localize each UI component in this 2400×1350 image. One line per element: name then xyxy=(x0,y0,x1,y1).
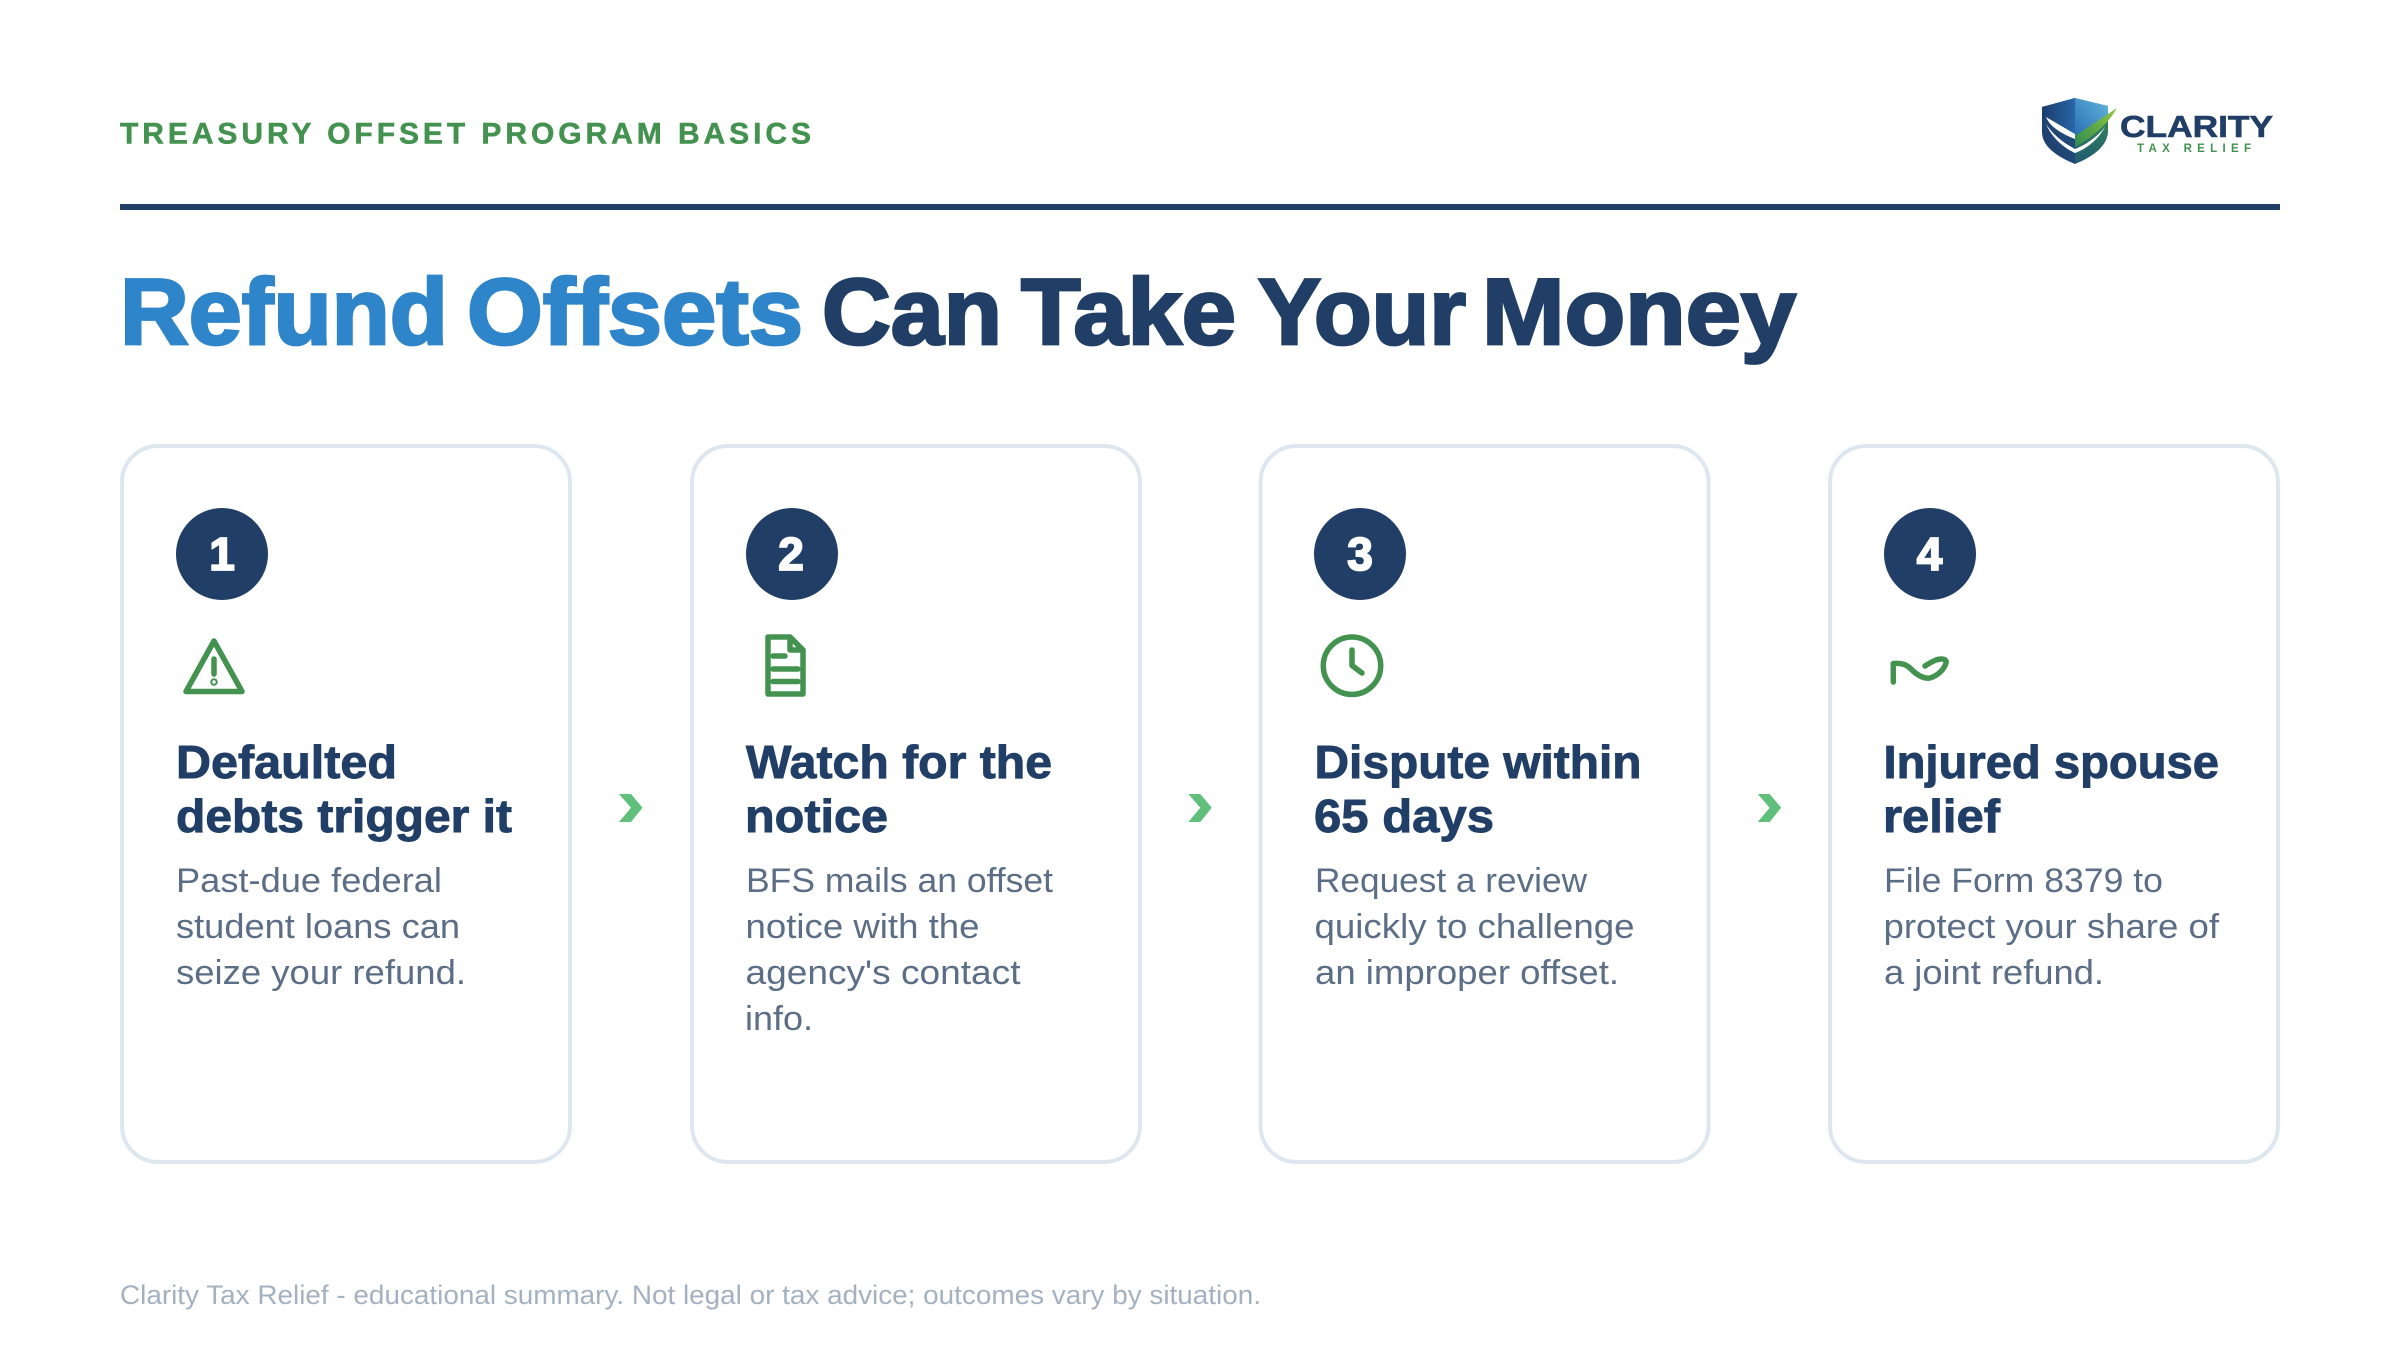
step 1 body: seize your refund. xyxy=(176,954,466,992)
step 4 heading: Injured spouse xyxy=(1884,736,2219,788)
step number 4 xyxy=(1884,508,1976,600)
step 4 body: a joint refund. xyxy=(1884,954,2104,992)
step number 3: 3 xyxy=(1347,528,1373,580)
step 4 heading: relief xyxy=(1883,790,2001,842)
step 3 body: Request a review xyxy=(1315,862,1587,900)
icon: document xyxy=(768,637,803,694)
step 1 heading: Defaulted xyxy=(176,736,397,788)
step 2 body xyxy=(745,862,1054,1038)
step 4 heading xyxy=(1883,736,2219,842)
step 3 heading: 65 days xyxy=(1314,790,1494,842)
step 2 body: notice with the xyxy=(746,908,980,946)
step 4 body: File Form 8379 to xyxy=(1884,862,2163,900)
arrow 3 xyxy=(1758,794,1781,822)
step 1 body xyxy=(176,862,466,992)
step 2 heading: notice xyxy=(745,790,888,842)
arrow 2 xyxy=(1188,794,1212,822)
icon: clock xyxy=(1323,637,1381,694)
logo: Clarity Tax Relief: TAX RELIEF xyxy=(2137,143,2251,155)
arrow 1 xyxy=(619,794,642,822)
icon: warning triangle xyxy=(186,641,242,692)
step 1 body: Past-due federal xyxy=(176,862,442,900)
step number 3 xyxy=(1314,508,1406,600)
footer disclaimer: Clarity Tax Relief - educational summary. Not legal or tax advice; outcomes vary by situation. xyxy=(120,1280,1261,1310)
logo: Clarity Tax Relief: CLARITY xyxy=(2120,109,2273,144)
eyebrow heading: TREASURY OFFSET PROGRAM BASICS xyxy=(120,118,811,150)
header rule xyxy=(120,204,2280,210)
step 1 body: student loans can xyxy=(176,908,460,946)
title: Your xyxy=(1258,259,1466,364)
title: Offsets xyxy=(467,259,803,364)
logo: Clarity Tax Relief xyxy=(2042,98,2273,164)
title: Can xyxy=(822,259,1002,364)
icon: signature squiggle xyxy=(1893,659,1946,682)
step 3 heading: Dispute within xyxy=(1314,736,1642,788)
step 3 body: quickly to challenge xyxy=(1314,908,1634,946)
step 3 heading xyxy=(1314,736,1642,842)
step 3 body: an improper offset. xyxy=(1315,954,1619,992)
step 1 heading xyxy=(176,736,512,842)
title: Refund xyxy=(120,259,448,364)
panel: step 4 xyxy=(1830,446,2278,1162)
step 2 body: BFS mails an offset xyxy=(746,862,1054,900)
title xyxy=(120,259,1796,364)
title: Take xyxy=(1021,259,1236,364)
step number 1: 1 xyxy=(209,528,235,580)
step 3 body xyxy=(1314,862,1634,992)
step 1 heading: debts trigger it xyxy=(176,790,512,842)
step number 4: 4 xyxy=(1917,528,1943,580)
title: Money xyxy=(1482,259,1796,364)
panel: step 2 xyxy=(692,446,1140,1162)
panel: step 3 xyxy=(1260,446,1708,1162)
panel: step 1 xyxy=(122,446,570,1162)
step 2 body: agency's contact xyxy=(746,954,1021,992)
step 4 body: protect your share of xyxy=(1884,908,2220,946)
step number 1 xyxy=(176,508,268,600)
step 2 heading: Watch for the xyxy=(746,736,1052,788)
step number 2 xyxy=(746,508,838,600)
step 2 body: info. xyxy=(745,1000,813,1038)
step 4 body xyxy=(1884,862,2220,992)
step number 2: 2 xyxy=(778,528,804,580)
step 2 heading xyxy=(745,736,1052,842)
